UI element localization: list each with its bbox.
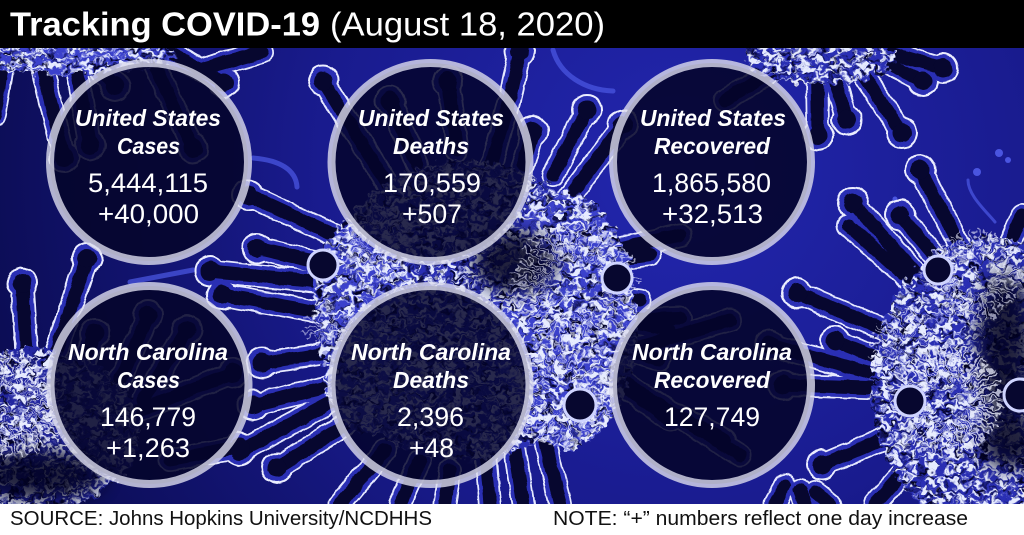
virus knobs on bodies [308, 250, 1024, 421]
number: 127,749 [664, 402, 760, 432]
heading: United States [358, 105, 504, 131]
heading: Cases [117, 133, 180, 159]
numbers: +48 [409, 433, 454, 463]
numbers: +32,513 [662, 199, 763, 229]
numbers: 146,779 [100, 402, 196, 432]
numbers [652, 168, 771, 229]
heading [640, 105, 786, 159]
panel: North Carolina Recovered [613, 286, 811, 484]
heading [75, 105, 221, 159]
heading: North Carolina [68, 339, 228, 365]
header bar [0, 0, 1024, 48]
heading: North Carolina [351, 339, 511, 365]
panel: United States Recovered [613, 63, 811, 261]
floating filaments [130, 50, 995, 282]
heading [632, 339, 792, 393]
title: Tracking COVID-19 [10, 6, 320, 42]
heading: Deaths [393, 133, 469, 159]
floating particles [892, 149, 1011, 202]
heading [358, 105, 504, 159]
heading: United States [640, 105, 786, 131]
panel: United States Deaths [332, 63, 530, 261]
numbers [88, 168, 208, 229]
numbers: +1,263 [106, 433, 190, 463]
increase note: NOTE: “+” numbers reflect one day increase [553, 507, 968, 530]
numbers [397, 402, 464, 463]
date: (August 18, 2020) [330, 6, 605, 42]
numbers: +40,000 [98, 199, 199, 229]
heading: North Carolina [632, 339, 792, 365]
heading: Recovered [654, 367, 771, 393]
virus body dark cores [0, 230, 1024, 501]
panel: North Carolina Cases [50, 286, 248, 484]
footer bar [0, 504, 1024, 535]
heading: United States [75, 105, 221, 131]
numbers: 2,396 [397, 402, 464, 432]
panel: United States Cases [50, 63, 248, 261]
heading: Recovered [654, 133, 771, 159]
heading [351, 339, 511, 393]
heading: Deaths [393, 367, 469, 393]
numbers [383, 168, 481, 229]
numbers: +507 [402, 199, 462, 229]
numbers [100, 402, 196, 463]
numbers: 1,865,580 [652, 168, 771, 198]
heading: Cases [117, 367, 180, 393]
radial fibres [0, 214, 1007, 439]
heading [68, 339, 228, 393]
numbers: 170,559 [383, 168, 481, 198]
numbers: 5,444,115 [88, 168, 208, 198]
panel: North Carolina Deaths [332, 286, 530, 484]
source note: SOURCE: Johns Hopkins University/NCDHHS [10, 507, 432, 530]
